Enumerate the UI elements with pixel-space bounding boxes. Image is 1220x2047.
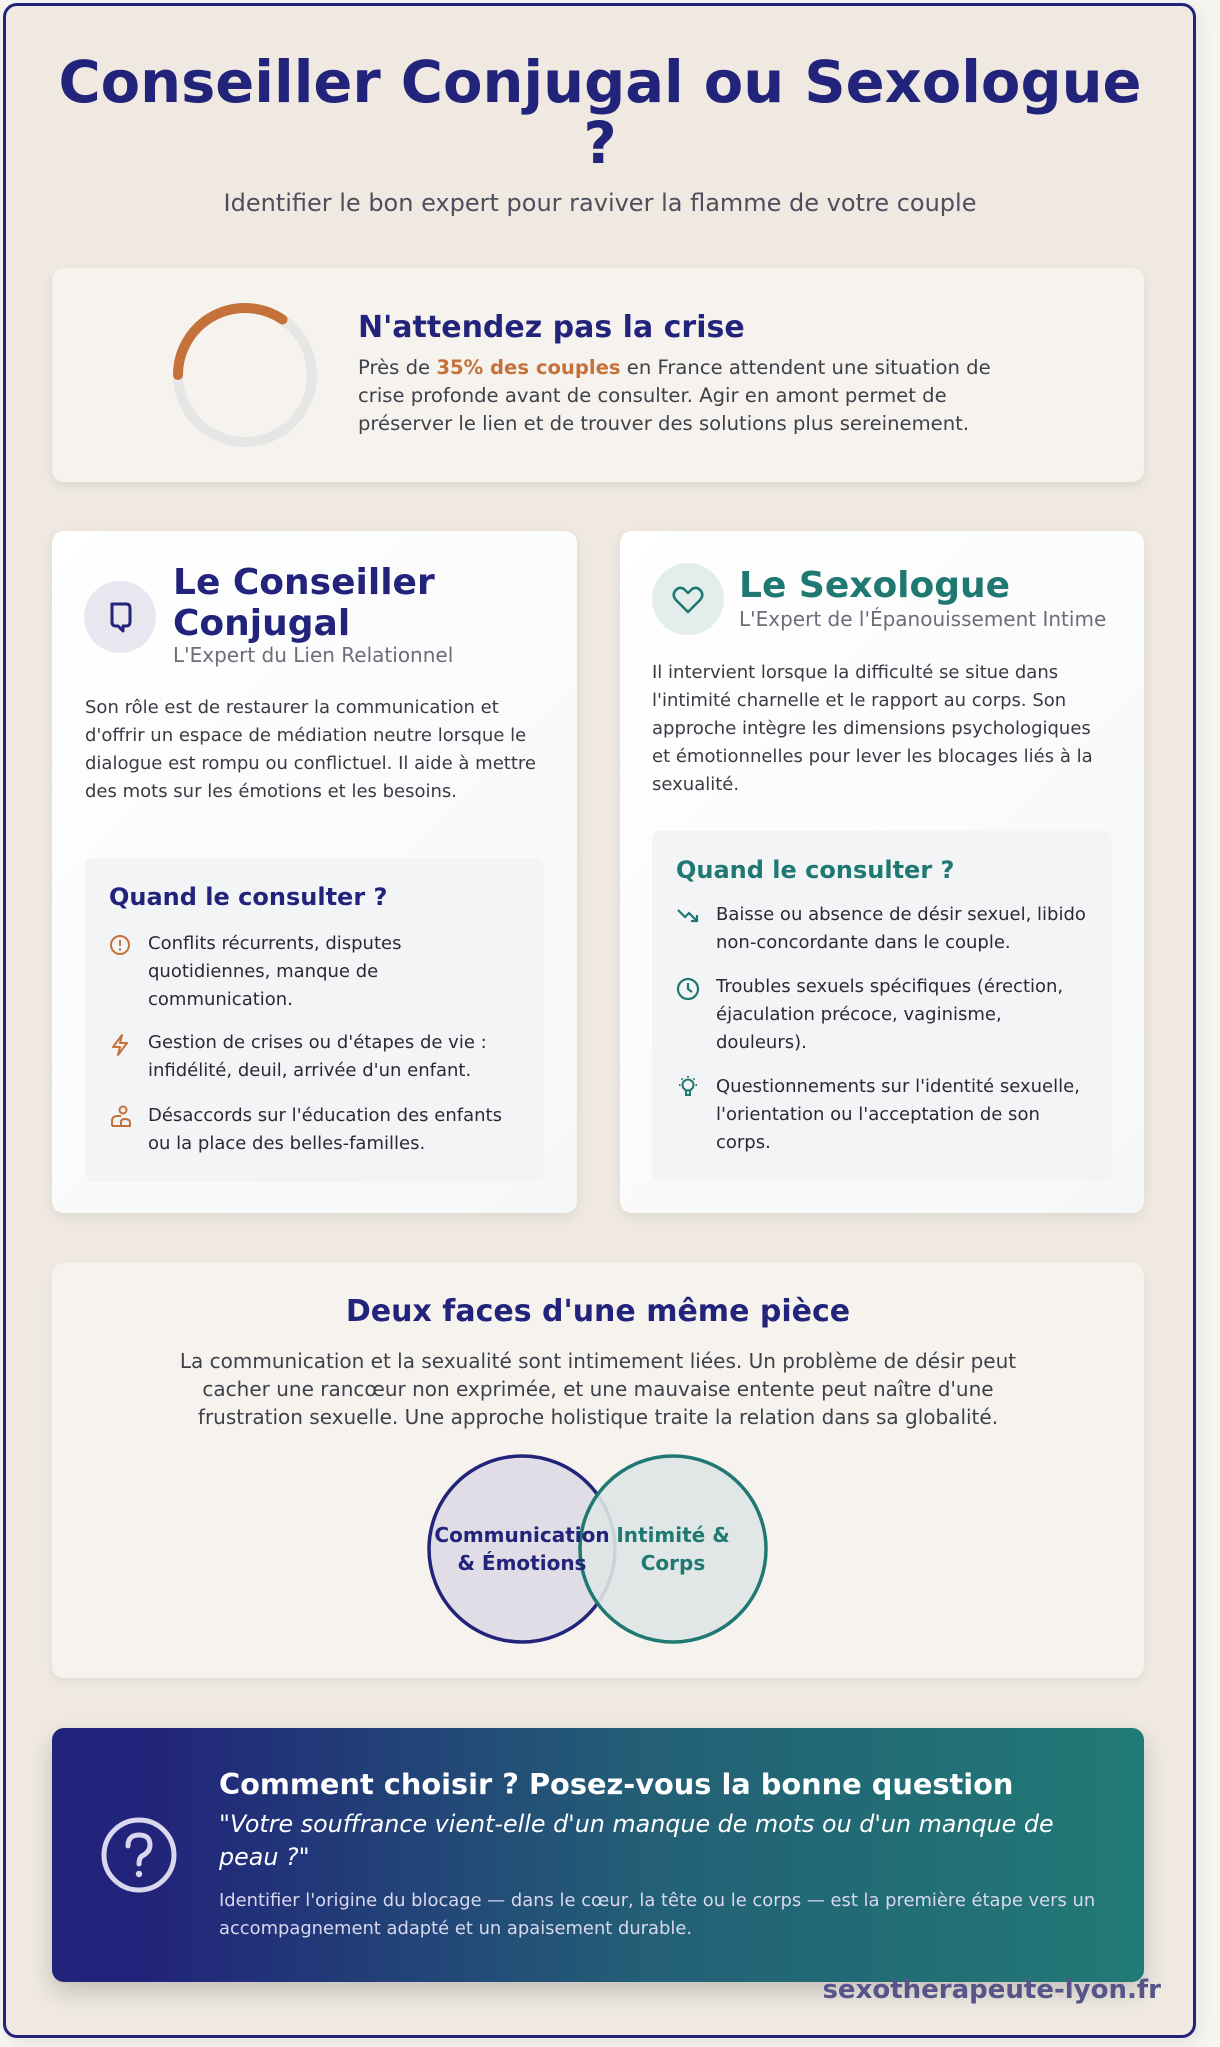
item 1 [677,904,1086,953]
item 1 [110,933,401,1010]
chart: 35% ring [173,303,317,447]
icon: question [102,1818,176,1892]
title: Conseiller Conjugal ou Sexologue ? [58,49,1142,177]
heading: Le Conseiller Conjugal [173,562,435,644]
subtitle: L'Expert de l'Épanouissement Intime [739,607,1106,631]
icon: heart [652,563,724,635]
item 3 [679,1076,1080,1153]
chart: venn diagram: & Émotions [458,1551,586,1575]
heading: Quand le consulter ? [676,856,954,884]
text block: Il intervient lorsque la difficulté se situe dans l'intimité charnelle et le rapport au corps. Son approche intègre les dimensions psychologiques et émotionnelles pour lever les blocages liés à la sexualité. [652,662,1093,795]
panel: conseiller conjugal [52,531,577,1213]
text block: Son rôle est de restaurer la communication et d'offrir un espace de médiation neutre lorsque le dialogue est rompu ou conflictuel. Il aide à mettre des mots sur les émotions et les besoins. [85,697,536,802]
icon: alert [110,935,130,955]
panel: quand consulter [85,858,544,1182]
heading: Le Sexologue [739,565,1010,606]
text block: Près de 35% des couples en France attendent une situation de crise profonde avant de consulter. Agir en amont permet de préserver le lien et de trouver des solutions plus sereinement. [358,356,991,435]
item 2 [112,1032,487,1081]
footer: source: sexotherapeute-lyon.fr [822,1975,1161,2005]
subtitle: Identifier le bon expert pour raviver la flamme de votre couple [224,189,976,217]
quote: "Votre souffrance vient-elle d'un manque de mots ou d'un manque de peau ?" [219,1810,1054,1871]
chart: venn diagram: Communication [434,1523,610,1547]
icon: bulb [679,1076,697,1096]
icon: clock [676,978,700,1000]
heading: N'attendez pas la crise [358,310,745,345]
panel: quand consulter [652,831,1112,1181]
panel: quand consulter: Conflits récurrents, disputes quotidiennes, manque de communication. [148,933,401,1010]
icon: chat [84,581,156,653]
panel: quand consulter: Baisse ou absence de désir sexuel, libido non-concordante dans le couple. [716,904,1086,953]
icon: trend down [677,909,698,922]
panel: quand consulter: Gestion de crises ou d'étapes de vie : infidélité, deuil, arrivée d'un enfant. [148,1032,487,1081]
panel: quand consulter: Désaccords sur l'éducation des enfants ou la place des belles-familles. [148,1105,502,1154]
subtitle: L'Expert du Lien Relationnel [173,643,453,667]
icon: family [111,1106,131,1127]
text block: La communication et la sexualité sont intimement liées. Un problème de désir peut cacher une rancœur non exprimée, et une mauvaise entente peut naître d'une frustration sexuelle. Une approche holistique traite la relation dans sa globalité. [180,1349,1016,1429]
heading: Comment choisir ? Posez-vous la bonne question [219,1767,1013,1801]
chart: venn diagram [427,1454,768,1644]
panel: quand consulter: Troubles sexuels spécifiques (érection, éjaculation précoce, vaginisme, douleurs). [716,976,1063,1053]
text block: Identifier l'origine du blocage — dans le cœur, la tête ou le corps — est la première étape vers un accompagnement adapté et un apaisement durable. [219,1890,1095,1939]
item 2 [676,976,1063,1053]
panel: stat [52,268,1144,482]
chart: venn diagram: Intimité & [616,1523,730,1547]
panel: deux faces [52,1263,1144,1678]
panel: quand consulter: Questionnements sur l'identité sexuelle, l'orientation ou l'acceptation de son corps. [716,1076,1080,1153]
heading: Deux faces d'une même pièce [346,1294,850,1329]
panel: sexologue [620,531,1144,1213]
item 3 [111,1105,502,1154]
callout: comment choisir [52,1728,1144,1982]
chart: venn diagram: Corps [641,1551,705,1575]
heading: Quand le consulter ? [109,883,387,911]
icon: bolt [112,1034,128,1056]
